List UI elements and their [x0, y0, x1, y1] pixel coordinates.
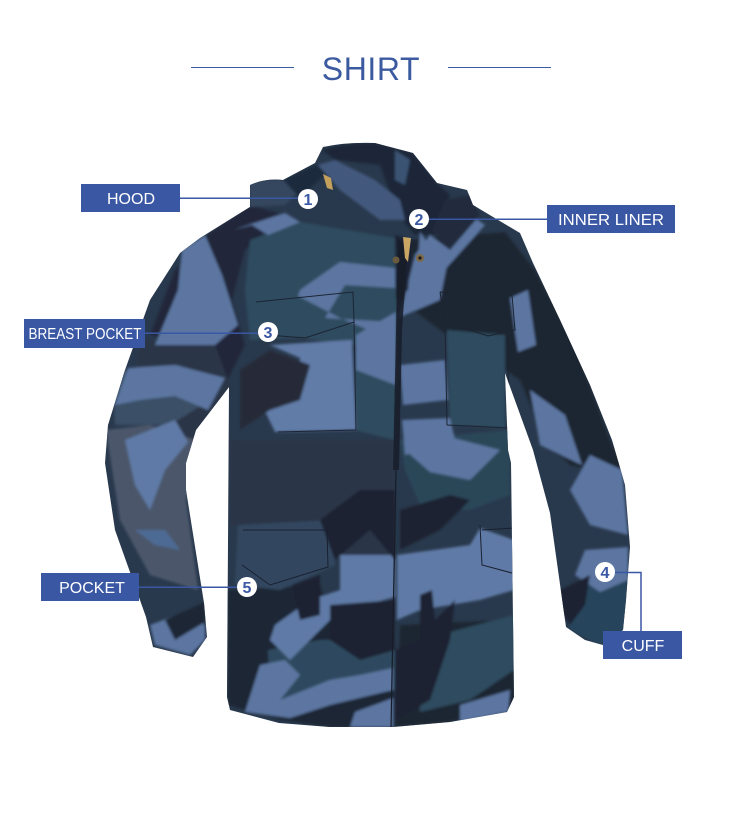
- callout: cuff: [595, 562, 682, 659]
- large dark regions: [400, 232, 630, 480]
- dark camouflage streaks: [320, 490, 395, 560]
- title rule right: [448, 67, 551, 68]
- callout: inner liner: 2: [415, 212, 424, 229]
- callout: inner liner: [409, 205, 675, 233]
- center opening: [391, 470, 396, 727]
- callout: hood: [81, 184, 318, 212]
- light camouflage regions: [155, 235, 238, 345]
- jacket: [105, 142, 630, 727]
- breast pocket flap lines: [256, 292, 515, 432]
- teal regions: [245, 222, 398, 440]
- callout: cuff: 4: [601, 565, 610, 582]
- collar and hood: [322, 143, 450, 235]
- callout: pocket: POCKET: [59, 580, 125, 597]
- callout: hood: HOOD: [107, 191, 155, 208]
- callout: cuff: CUFF: [622, 638, 665, 655]
- title rule left: [191, 67, 294, 68]
- title: SHIRT: [322, 51, 420, 87]
- callout: breast pocket: 3: [264, 325, 273, 342]
- zipper pull: [323, 174, 424, 264]
- callout: pocket: 5: [243, 580, 252, 597]
- callout: inner liner: INNER LINER: [558, 212, 664, 229]
- callout: breast pocket: BREAST POCKET: [28, 326, 142, 343]
- lower pocket flap lines: [242, 525, 514, 585]
- callout: hood: 1: [304, 192, 313, 209]
- callout: pocket: [41, 573, 257, 601]
- callout: breast pocket: [24, 319, 278, 348]
